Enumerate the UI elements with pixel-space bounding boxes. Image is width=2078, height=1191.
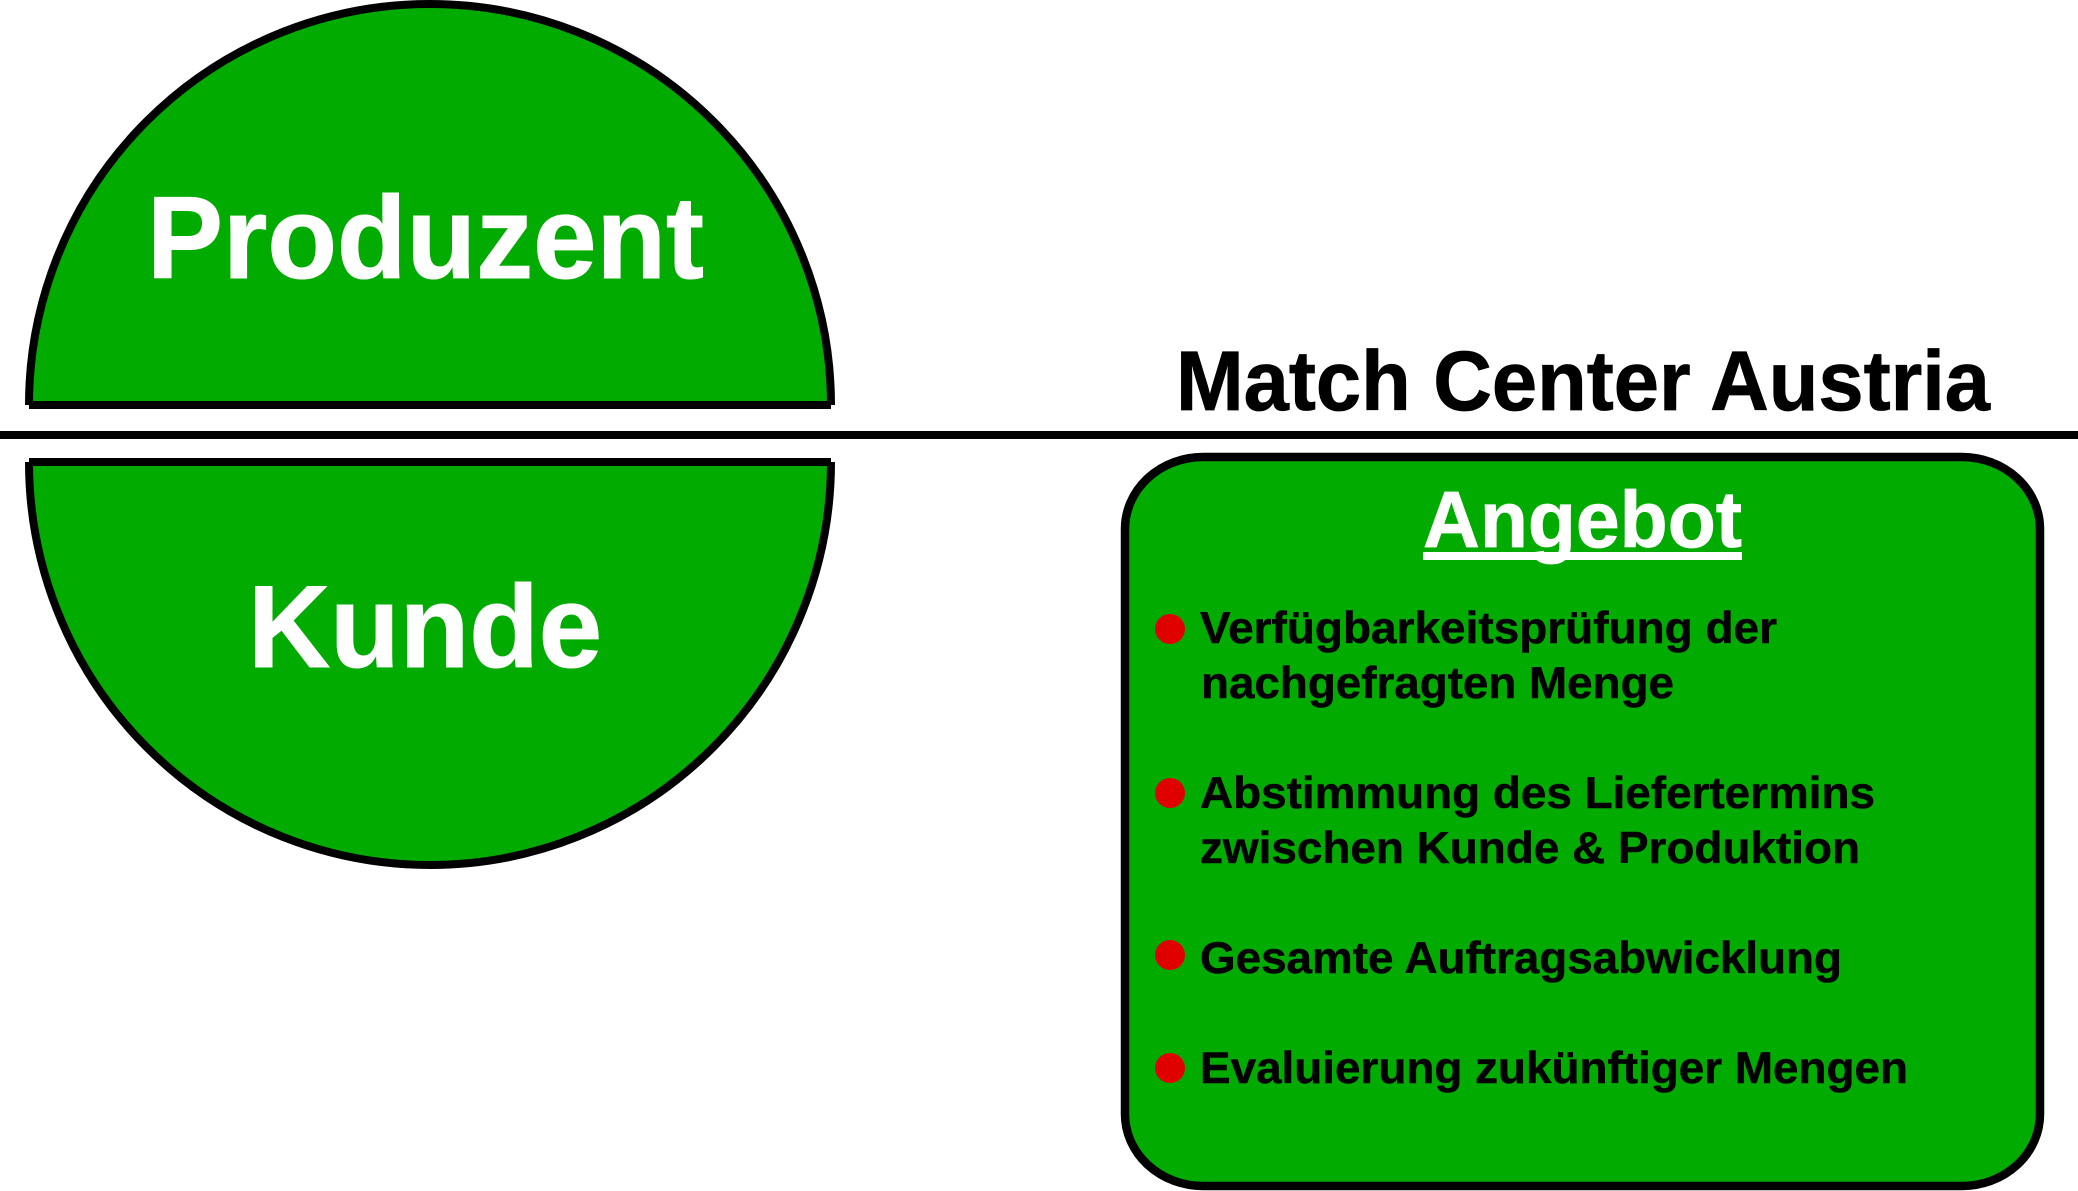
bullet item: Abstimmung: zwischen Kunde & Produktion <box>1200 824 1860 873</box>
bullet item: Verfügbarkeitsprüfung <box>1155 604 1777 708</box>
bullet item: Verfügbarkeitsprüfung: Verfügbarkeitsprüfung der <box>1200 604 1777 653</box>
panel: Kunde semicircle <box>29 462 831 865</box>
bullet item: Abstimmung <box>1155 769 1875 873</box>
bullet item: Gesamte Auftragsabwicklung: Gesamte Auftragsabwicklung <box>1200 934 1842 983</box>
divider line <box>0 431 2078 439</box>
heading: Match Center Austria: Match Center Austria <box>1176 334 1991 428</box>
bullet item: Verfügbarkeitsprüfung: nachgefragten Menge <box>1201 659 1674 708</box>
panel: Produzent semicircle <box>29 4 831 405</box>
label: Kunde: Kunde <box>248 561 602 692</box>
label: Produzent: Produzent <box>147 172 704 303</box>
bullet item: Evaluierung: Evaluierung zukünftiger Mengen <box>1200 1044 1908 1093</box>
panel: Angebot <box>1125 457 2040 1186</box>
heading: Angebot: Angebot <box>1423 475 1742 564</box>
bullet item: Abstimmung: Abstimmung des Liefertermins <box>1200 769 1875 818</box>
